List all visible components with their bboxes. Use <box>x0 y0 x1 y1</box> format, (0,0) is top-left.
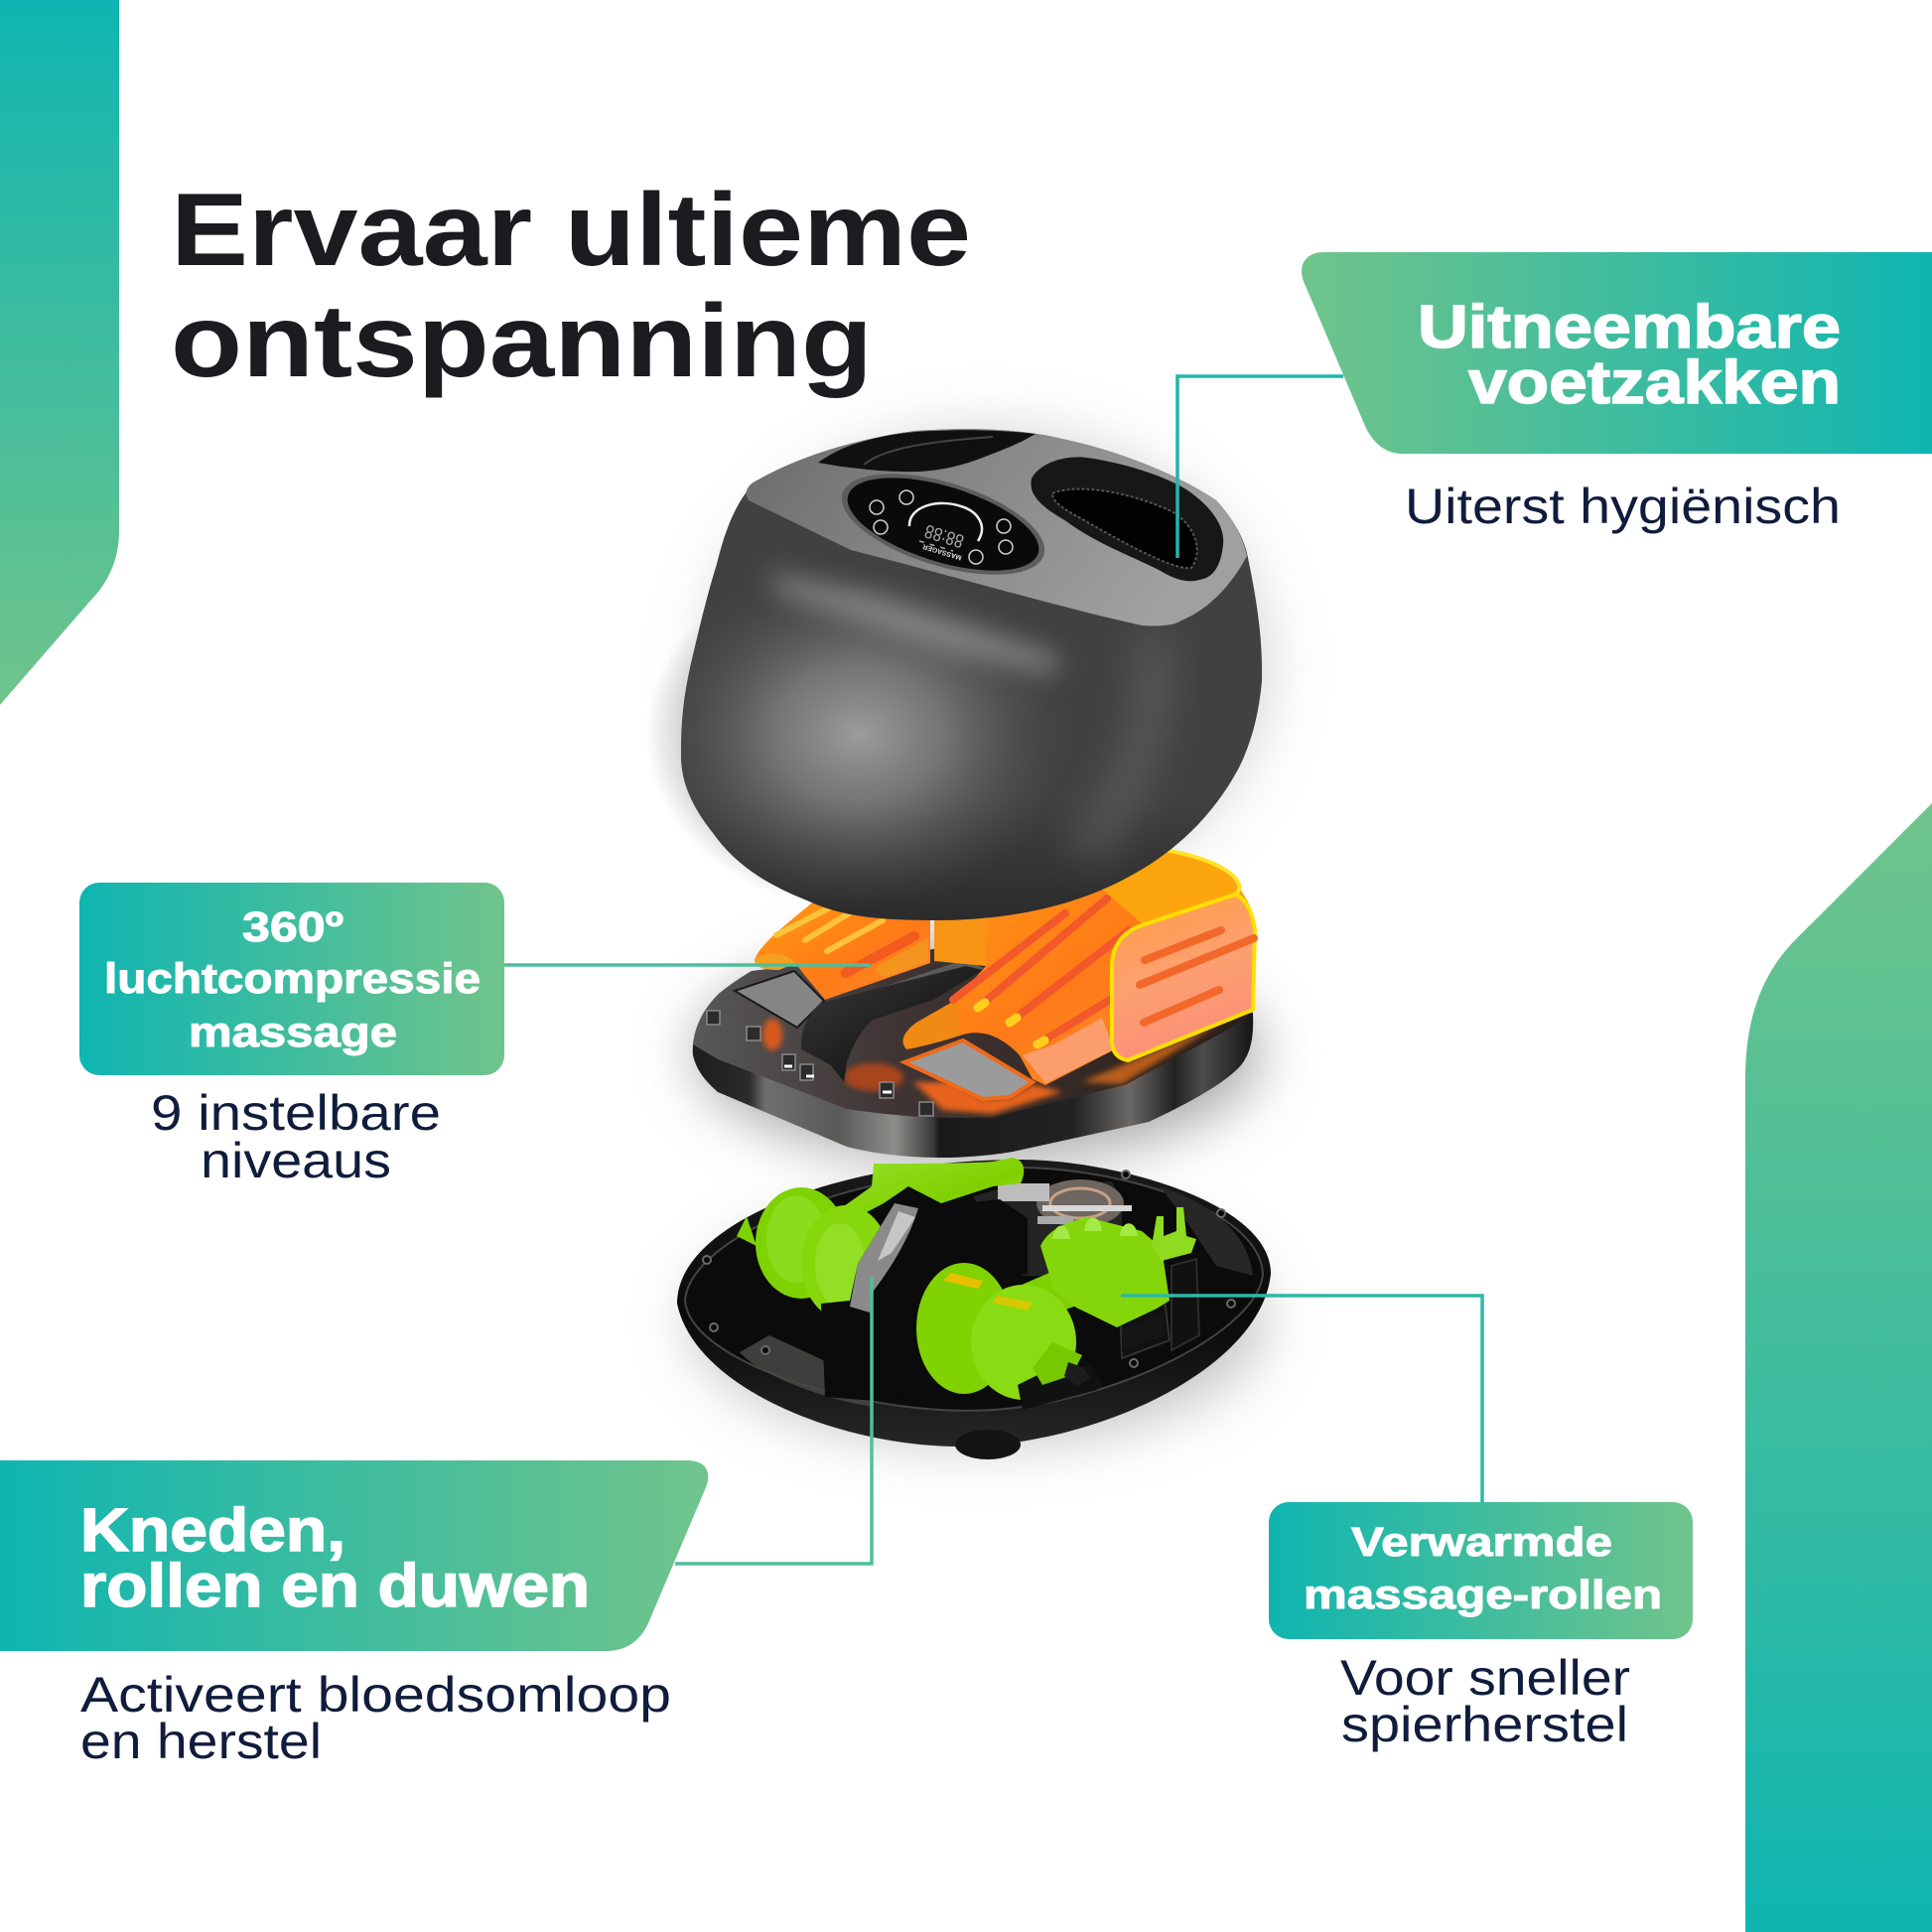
callout connector: air compression <box>503 963 871 967</box>
plate top surface <box>693 943 1253 1118</box>
callout connector: heated rollers <box>1121 1296 1482 1502</box>
product illustration: exploded foot massager <box>645 427 1271 1459</box>
middle air bag section <box>934 918 986 966</box>
text: Activeert bloedsomloop en herstel: Activeert bloedsomloop <box>80 1667 671 1723</box>
callout panel: 360 luchtcompressie massage: massage <box>189 1009 397 1056</box>
soft shadow behind product <box>690 427 1271 1445</box>
callout panel: Verwarmde massage-rollen <box>1269 1502 1693 1639</box>
plate windows <box>735 971 824 1028</box>
upper plate with air bags <box>693 849 1256 1158</box>
title: ontspanning <box>171 284 873 399</box>
plate side wall <box>693 993 1253 1158</box>
title: Ervaar ultieme <box>171 173 971 288</box>
text: Activeert bloedsomloop en herstel: en herstel <box>80 1714 322 1769</box>
clip highlights <box>784 1066 892 1092</box>
right air bag <box>903 887 1142 1085</box>
control panel <box>830 454 1056 595</box>
green right rollers and block <box>916 1207 1196 1410</box>
text: Uiterst hygiënisch: Uiterst hygiënisch <box>1405 479 1841 534</box>
text: 9 instelbare niveaus: 9 instelbare <box>151 1085 441 1141</box>
callout panel: Uitneembare voetzakken: voetzakken <box>1468 348 1841 416</box>
lid top surface <box>747 429 1247 625</box>
black center bracket <box>821 1199 1028 1403</box>
back foot opening <box>818 430 1035 472</box>
callout panel: 360 luchtcompressie massage: luchtcompressie <box>104 955 481 1003</box>
callout panel: Kneden, rollen en duwen: Kneden, <box>80 1496 345 1564</box>
orange reflections <box>762 1019 1221 1114</box>
cuff rim <box>1159 849 1239 895</box>
decorative panel: top left green corner <box>0 0 119 705</box>
front foot opening <box>1031 457 1223 581</box>
control panel: 88:88 <box>922 520 966 551</box>
callout panel: Kneden, rollen en duwen: rollen en duwen <box>80 1552 590 1619</box>
callout panel: Verwarmde massage-rollen: massage-rollen <box>1304 1572 1662 1617</box>
callout panel: Verwarmde massage-rollen: Verwarmde <box>1351 1519 1612 1565</box>
arch bracket <box>801 966 983 1082</box>
text: 9 instelbare niveaus <box>151 1085 441 1188</box>
callout panel: Kneden, rollen en duwen <box>0 1460 708 1651</box>
decorative panel: bottom right green corner <box>1745 803 1932 1932</box>
text: Activeert bloedsomloop en herstel <box>80 1667 671 1769</box>
callout panel: 360 luchtcompressie massage: 360º <box>242 903 344 951</box>
callout panel: 360 luchtcompressie massage <box>79 883 504 1075</box>
callout panel: Uitneembare voetzakken <box>1302 252 1932 454</box>
text: Voor sneller spierherstel <box>1340 1650 1630 1752</box>
callout panel: Uitneembare voetzakken: Uitneembare <box>1418 293 1841 360</box>
text: 9 instelbare niveaus: niveaus <box>201 1133 391 1188</box>
main housing body <box>645 429 1262 920</box>
green massage rollers <box>737 1158 1024 1320</box>
text: Voor sneller spierherstel: Voor sneller <box>1340 1650 1630 1706</box>
lower basin <box>677 1160 1271 1459</box>
motor <box>973 1179 1132 1276</box>
front panel of cuff <box>1112 895 1255 1060</box>
left air bag <box>755 898 930 1000</box>
plate clips <box>707 1011 933 1116</box>
control panel: MASSAGER <box>922 542 963 561</box>
callout connector: removable foot bags <box>1177 376 1343 558</box>
title <box>171 173 971 399</box>
text: Voor sneller spierherstel: spierherstel <box>1341 1697 1628 1752</box>
callout connector: kneading <box>675 1277 872 1564</box>
back cuff <box>1092 849 1256 1052</box>
